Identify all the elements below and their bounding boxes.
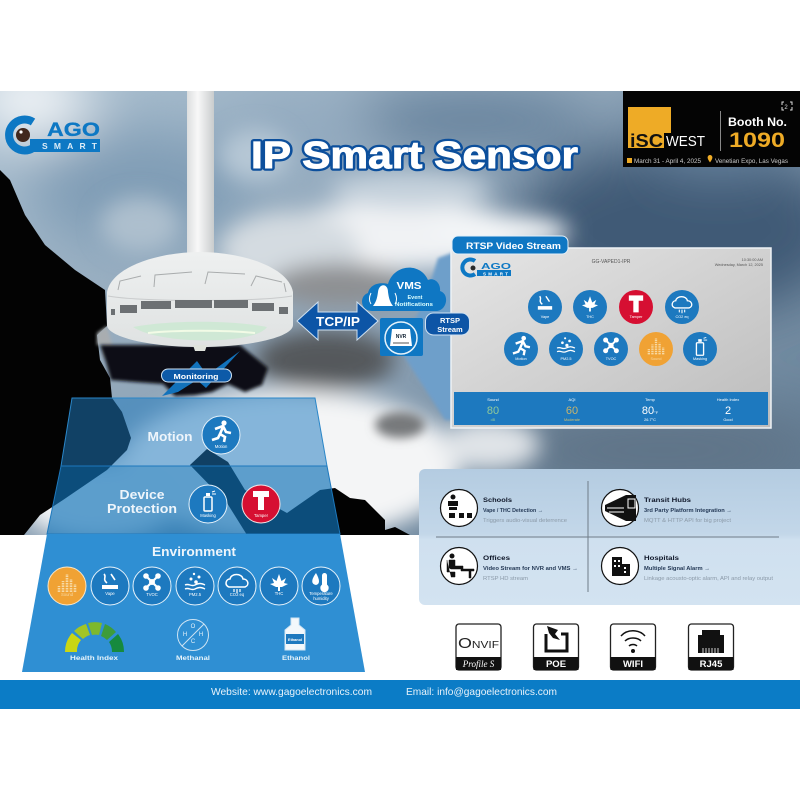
use case: hospitals: Linkage acousto-optic alarm, API and relay output xyxy=(644,576,774,582)
methanal icon: H xyxy=(199,632,203,638)
booth banner: WEST xyxy=(666,133,705,150)
methanal icon: O xyxy=(191,624,196,630)
blue sky wedge xyxy=(402,251,450,422)
section: environment: TVOC xyxy=(146,592,158,597)
section: environment: PM2.5 xyxy=(189,592,202,597)
use case: transit hubs: Transit Hubs xyxy=(644,497,691,504)
use case: schools: Triggers audio-visual deterrence xyxy=(483,518,567,524)
section: device protection: Masking xyxy=(200,513,216,518)
panel metrics bar: Sound xyxy=(487,397,499,402)
section: environment xyxy=(48,545,340,605)
NVR icon xyxy=(380,318,423,356)
use case: offices: Video Stream for NVR and VMS → xyxy=(483,566,578,572)
VMS cloud: Notifications xyxy=(395,302,433,308)
VMS cloud: Event xyxy=(408,295,423,301)
footer band: Email: info@gagoelectronics.com xyxy=(406,686,557,698)
panel: RTSP video stream xyxy=(451,236,771,428)
title: IP Smart Sensor xyxy=(251,135,578,177)
panel logo: AGO xyxy=(481,261,512,271)
booth banner: iSC xyxy=(630,131,663,151)
methanal icon: C xyxy=(191,639,196,645)
panel metrics bar: Moderate xyxy=(564,418,580,422)
badge: onvif: ONVIF xyxy=(458,635,499,652)
panel tab: RTSP Video Stream xyxy=(466,241,561,251)
panel: use cases xyxy=(419,469,800,605)
badge: poe: POE xyxy=(546,659,566,670)
sensor device xyxy=(107,91,293,351)
use case: hospitals: Multiple Signal Alarm → xyxy=(644,566,710,572)
section: environment: Temperature xyxy=(309,591,333,596)
panel metrics bar: Temp xyxy=(645,397,656,402)
panel metrics bar: 26.7°C xyxy=(644,418,656,422)
TCP/IP arrow: TCP/IP xyxy=(316,315,360,329)
use case: hospitals xyxy=(602,548,774,584)
panel: RTSP video stream: GG-VAPED1-IPR xyxy=(592,259,631,265)
monitoring label and lightning xyxy=(162,351,240,396)
section: motion: Motion xyxy=(148,429,193,444)
use case: transit hubs: 3rd Party Platform Integration → xyxy=(644,508,732,514)
section: environment: THC xyxy=(275,591,283,596)
title: IP Smart Sensor xyxy=(251,135,578,177)
health index gauge xyxy=(65,622,124,662)
section: device protection xyxy=(107,485,280,523)
panel logo xyxy=(462,260,512,276)
footer band xyxy=(0,680,800,709)
black silhouette xyxy=(0,170,131,535)
use case: schools xyxy=(440,490,567,526)
methanal icon xyxy=(176,620,210,662)
panel metrics bar: 80°F xyxy=(642,405,659,417)
section: motion: Motion xyxy=(215,444,228,449)
dark smoke under sensor xyxy=(100,345,268,396)
use case: hospitals: Hospitals xyxy=(644,555,679,562)
panel: RTSP video stream: Wednesday, March 12, 2025 xyxy=(715,263,763,267)
panel sensor icons: Masking xyxy=(693,357,707,361)
panel metrics bar: 2 xyxy=(725,405,731,417)
panel sensor icons: THC xyxy=(586,315,594,319)
section: environment: Vape xyxy=(105,591,115,596)
badge: wifi: WIFI xyxy=(623,659,643,670)
panel metrics bar: 80 xyxy=(487,405,499,417)
TCP/IP arrow xyxy=(297,302,378,340)
booth banner xyxy=(623,91,800,167)
section: device protection: Tamper xyxy=(254,513,269,518)
panel metrics bar: dB xyxy=(491,418,496,422)
use case: offices: RTSP HD stream xyxy=(483,576,528,582)
booth banner: Venetian Expo, Las Vegas xyxy=(715,158,789,165)
panel logo: SMART xyxy=(483,272,508,276)
health index gauge: Health Index xyxy=(70,655,118,662)
booth banner: 1090 xyxy=(729,129,785,152)
panel sensor icons xyxy=(504,290,717,366)
panel: RTSP video stream: 10:30:00 AM xyxy=(742,258,763,262)
section: environment: Sound xyxy=(61,592,74,597)
footer band: Website: www.gagoelectronics.com xyxy=(211,686,372,698)
logo: Gago Smart: AGO xyxy=(47,120,100,141)
badge: wifi xyxy=(610,624,656,670)
panel sensor icons: Motion xyxy=(515,357,527,361)
booth banner: Booth No. xyxy=(728,117,787,129)
RTSP stream label: RTSP xyxy=(440,316,460,325)
panel metrics bar: AQI xyxy=(569,397,575,402)
dark smoke band xyxy=(190,449,410,535)
use case: transit hubs: MQTT & HTTP API for big project xyxy=(644,518,732,524)
RTSP stream label xyxy=(426,313,470,335)
pyramid: sensing categories xyxy=(22,398,365,672)
panel sensor icons: TVOC xyxy=(606,357,617,361)
ethanol bottle icon: Ethanol xyxy=(282,655,310,662)
section: device protection: Device xyxy=(120,487,164,502)
panel sensor icons: CO2 eq xyxy=(675,315,689,319)
methanal icon: Methanal xyxy=(176,655,210,662)
badge: onvif: Profile S xyxy=(462,659,495,669)
logo: Gago Smart: SMART xyxy=(42,141,98,151)
methanal icon: H xyxy=(183,632,187,638)
panel metrics bar: Good xyxy=(723,418,733,422)
panel sensor icons: Sound xyxy=(651,357,661,361)
smoke puff beside sensor xyxy=(94,324,112,348)
grey smoke puff xyxy=(375,412,425,438)
booth banner: March 31 - April 4, 2025 xyxy=(634,158,701,165)
section: device protection: Protection xyxy=(107,501,177,516)
use case: offices xyxy=(440,548,578,584)
RTSP stream label: Stream xyxy=(437,325,463,334)
badge: onvif xyxy=(456,624,501,670)
panel sensor icons: Vape xyxy=(541,315,549,319)
panel metrics bar: Health Index xyxy=(717,397,739,402)
panel metrics bar xyxy=(454,392,768,425)
section: environment: CO2 eq xyxy=(230,592,245,597)
VMS cloud xyxy=(362,268,446,311)
logo: Gago Smart xyxy=(9,119,100,152)
ethanol bottle icon: Ethanol xyxy=(288,638,302,642)
use case: schools: Vape / THC Detection → xyxy=(483,508,543,514)
panel sensor icons: PM2.5 xyxy=(561,357,571,361)
ethanol bottle icon xyxy=(282,618,310,662)
use case: transit hubs xyxy=(602,490,732,526)
badge: poe xyxy=(534,624,578,670)
use case: offices: Offices xyxy=(483,555,510,562)
section: environment: humidity xyxy=(313,596,330,601)
badge: rj45: RJ45 xyxy=(700,659,723,670)
VMS cloud: VMS xyxy=(396,281,422,292)
booth banner: 2 xyxy=(784,105,788,111)
panel sensor icons: Tamper xyxy=(630,315,643,319)
section: environment: Environment xyxy=(152,545,237,559)
background smoke photo xyxy=(0,65,800,540)
use case: schools: Schools xyxy=(483,497,512,504)
monitoring label and lightning: Monitoring xyxy=(174,372,219,381)
badge: rj45 xyxy=(688,624,734,670)
NVR icon: NVR xyxy=(396,334,407,340)
section: motion xyxy=(148,416,240,454)
panel metrics bar: 60 xyxy=(566,405,578,417)
panel tab xyxy=(452,236,568,254)
